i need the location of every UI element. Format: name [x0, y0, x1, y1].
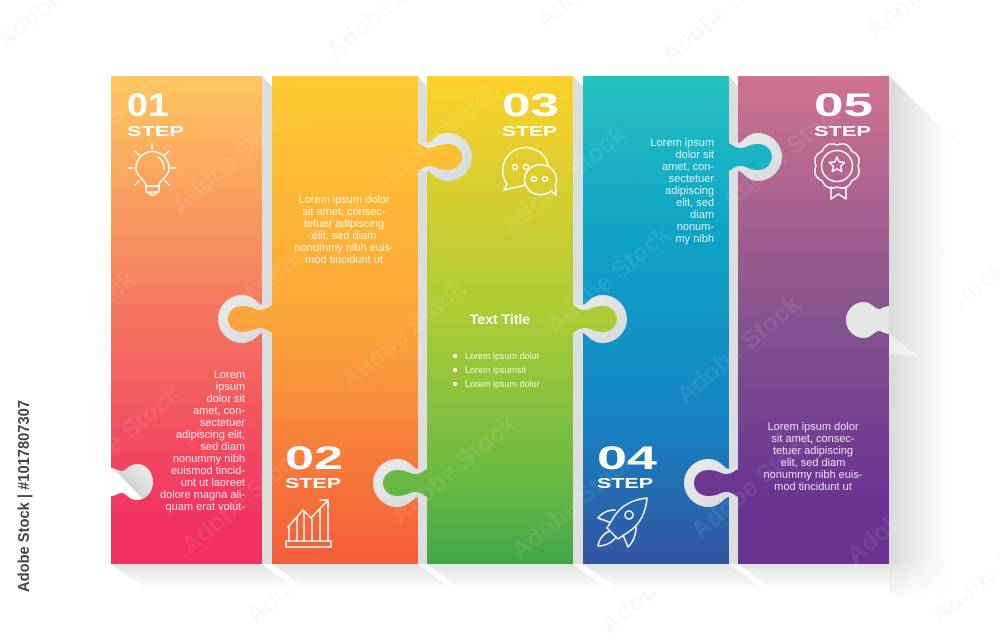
faint stock watermarks over panels: Adobe Stock	[506, 445, 641, 565]
connector: panel 5 tab into panel 4	[684, 459, 739, 507]
faint stock watermarks over panels	[6, 65, 976, 570]
text block: panel 2: nonummy nibh euis-	[294, 242, 394, 254]
text block: panel 4: elit, sed	[676, 197, 714, 209]
step 01 heading: 01	[127, 87, 169, 123]
text block: panel 1: unt ut laoreet	[181, 477, 245, 489]
faint stock watermarks over panels: Adobe Stock	[716, 95, 851, 215]
text block: panel 5: mod tincidunt ut	[774, 481, 852, 493]
text block: panel 1: sectetuer	[200, 417, 245, 429]
faint stock watermarks over panels: Adobe Stock	[236, 190, 371, 310]
side credit text: Adobe Stock | #1017807307	[16, 400, 33, 592]
step 04 heading	[597, 440, 657, 492]
text block: panel 2: Lorem ipsum dolor	[298, 194, 390, 206]
faint watermarks on the background: Adobe Stock	[241, 510, 376, 630]
connector: panel 2 tab into panel 3	[417, 133, 472, 181]
icon: award badge	[815, 144, 859, 199]
long drop shadows	[111, 76, 964, 600]
step 01 heading: STEP	[127, 123, 184, 140]
panel 2 content	[285, 194, 394, 547]
faint stock watermarks over panels: Adobe Stock	[336, 275, 471, 395]
connector: panel 3 tab into panel 4	[572, 295, 627, 343]
text block: panel 5: tetuer adipiscing	[773, 445, 853, 457]
connector: panel 4 tab into panel 5	[728, 133, 782, 181]
step 03 heading	[502, 87, 559, 140]
text block: panel 4: dolor sit	[675, 149, 714, 161]
panel 1 content	[127, 87, 245, 513]
text block: panel 1: ipsum	[216, 381, 245, 393]
bullet list: Lorem ipsumsit	[465, 365, 527, 375]
panel 5 content	[763, 87, 873, 493]
panel 4 content	[597, 137, 714, 547]
text block: panel 1: dolor sit	[206, 393, 245, 405]
step 02 heading	[285, 440, 343, 492]
faint stock watermarks over panels: Adobe Stock	[386, 410, 521, 530]
text block: panel 1: sed diam	[200, 441, 245, 453]
icon: rocket	[598, 498, 647, 547]
panel 4 background	[583, 76, 729, 564]
faint watermarks on the background: Adobe Stock	[596, 520, 731, 640]
step 04 heading: STEP	[597, 475, 653, 492]
text block: panel 4: diam	[690, 209, 714, 221]
gutters between panels	[262, 76, 738, 564]
panel 3 content	[453, 87, 559, 389]
bullet list: Lorem ipsum dolor	[465, 351, 540, 361]
step 02 heading: STEP	[285, 475, 341, 492]
text block: panel 1: dolore magna ali-	[160, 489, 245, 501]
panel 1 background	[111, 76, 262, 564]
faint stock watermarks over panels: Adobe Stock	[6, 265, 141, 385]
panel 3 background	[427, 76, 573, 564]
step 03 heading: 03	[502, 87, 559, 123]
faint stock watermarks over panels: Adobe Stock	[51, 380, 186, 500]
text block: panel 5: Lorem ipsum dolor	[767, 421, 859, 433]
notch: panel 5 right edge	[846, 302, 889, 338]
step 03 heading: STEP	[502, 123, 557, 140]
step 05 heading: 05	[814, 87, 873, 123]
text block: panel 4: nonum-	[677, 221, 714, 233]
text block: panel 5: sit amet, consec-	[771, 433, 855, 445]
text block: panel 4: amet, con-	[662, 161, 714, 173]
connector: panel 2 tab into panel 1	[218, 295, 273, 343]
text title: Text Title	[470, 311, 530, 327]
faint stock watermarks over panels: Adobe Stock	[176, 440, 311, 560]
text block: panel 2: tetuer adipiscing	[304, 218, 384, 230]
text block: panel 4: Lorem ipsum	[650, 137, 714, 149]
panel 2 background	[272, 76, 418, 564]
step 05 heading: STEP	[814, 123, 871, 140]
faint watermarks on the background: Adobe Stock	[831, 125, 966, 245]
icon: light bulb	[128, 144, 176, 195]
step 05 heading	[814, 87, 873, 140]
text block: panel 1: euismod tincid-	[171, 465, 245, 477]
faint stock watermarks over panels: Adobe Stock	[36, 65, 171, 185]
text block: panel 1: amet, con-	[193, 405, 245, 417]
icon: chat bubbles	[503, 148, 557, 195]
text block: panel 5: elit, sed diam	[781, 457, 845, 469]
bullet list: Lorem ipsum dolor	[465, 379, 540, 389]
faint stock watermarks over panels: Adobe Stock	[841, 450, 976, 570]
faint stock watermarks over panels: Adobe Stock	[541, 220, 676, 340]
panel 5 background	[738, 76, 889, 564]
text block: panel 2: elit, sed diam	[312, 230, 376, 242]
text block: panel 1: Lorem	[214, 369, 245, 381]
text block: panel 2: sit amet, consec-	[302, 206, 386, 218]
connector: panel 3 tab into panel 2	[373, 459, 428, 507]
notch: panel 1 left edge	[111, 464, 153, 500]
text block: panel 5: nonummy nibh euis-	[763, 469, 863, 481]
text block: panel 1: nonummy nibh	[173, 453, 245, 465]
step 02 heading: 02	[285, 440, 343, 476]
faint stock watermarks over panels: Adobe Stock	[166, 100, 301, 220]
text block: panel 4: sectetuer	[669, 173, 714, 185]
faint stock watermarks over panels: Adobe Stock	[371, 75, 506, 195]
icon: rising bar chart	[286, 500, 331, 547]
faint stock watermarks over panels: Adobe Stock	[671, 290, 806, 410]
text block: panel 4: adipiscing	[665, 185, 714, 197]
faint stock watermarks over panels: Adobe Stock	[686, 425, 821, 545]
bullet list	[453, 351, 540, 389]
text block: panel 1: adipiscing elit,	[176, 429, 245, 441]
faint stock watermarks over panels: Adobe Stock	[496, 120, 631, 240]
step 04 heading: 04	[597, 440, 657, 476]
text block: panel 2: mod tincidunt ut	[305, 254, 383, 266]
text block: panel 4: my nibh	[675, 233, 714, 245]
step 01 heading	[127, 87, 184, 140]
text block: panel 1: quam erat volut-	[166, 501, 245, 513]
